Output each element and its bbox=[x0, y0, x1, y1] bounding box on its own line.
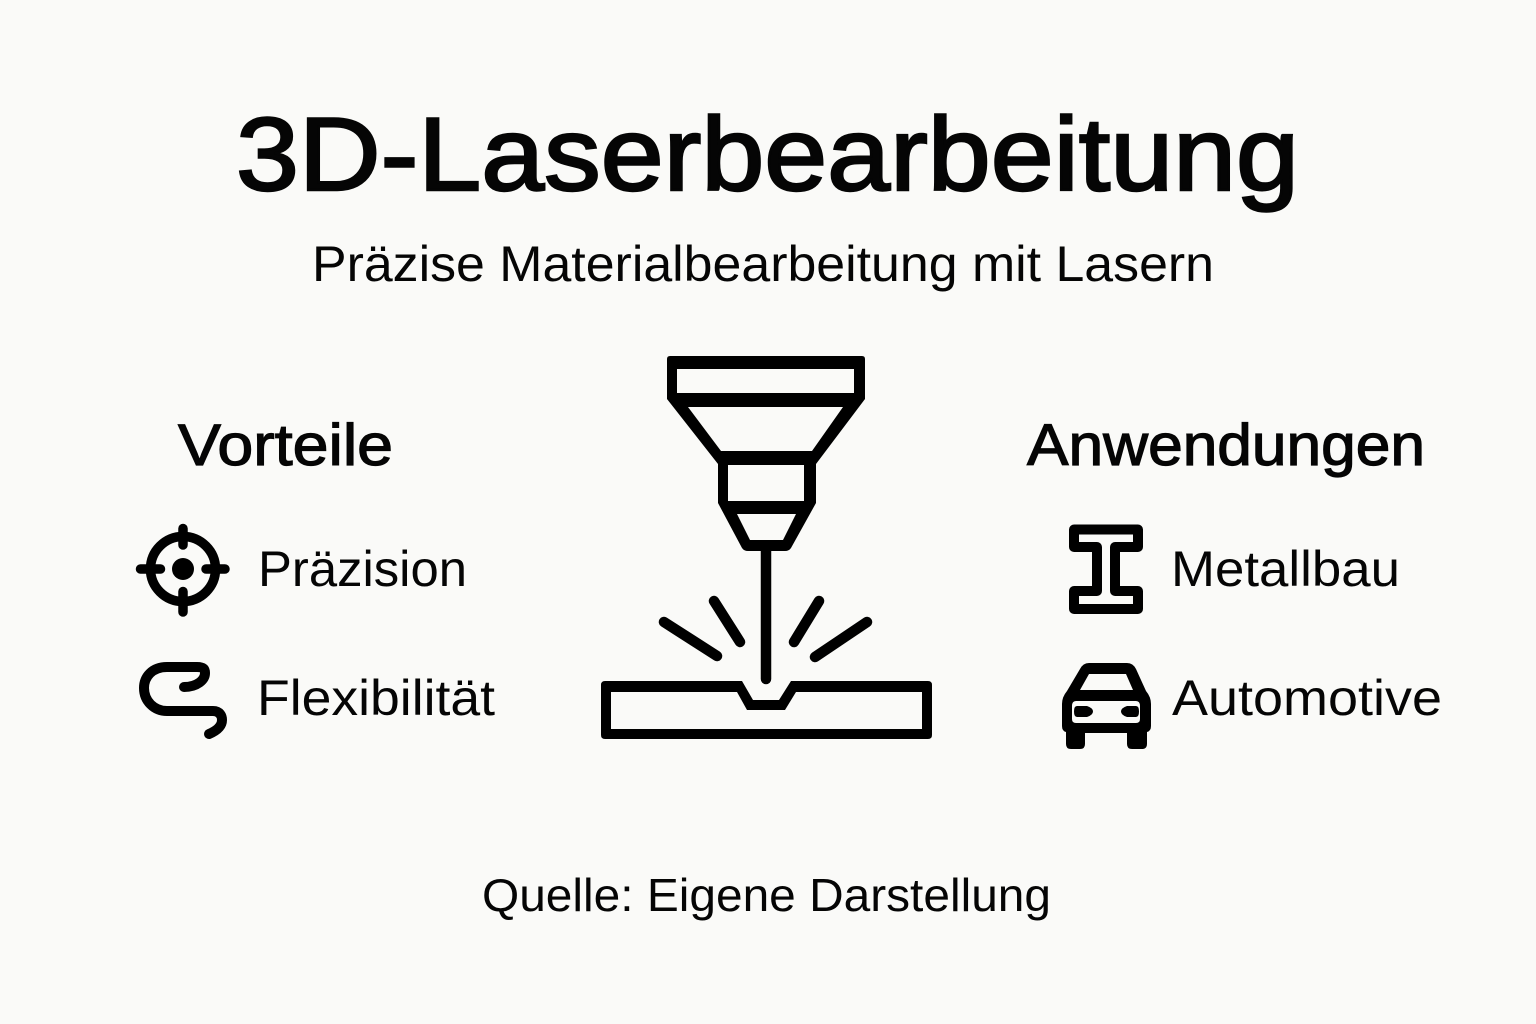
label: Präzision: Präzision bbox=[258, 541, 467, 597]
central icon: laser head cutting workpiece bbox=[601, 356, 932, 739]
laser beam bbox=[761, 550, 771, 679]
sparks bbox=[664, 601, 867, 657]
icon: flexible curve bbox=[144, 667, 222, 734]
icon: crosshair target bbox=[140, 528, 225, 612]
label: Flexibilität: Flexibilität bbox=[257, 670, 495, 726]
workpiece with notch bbox=[601, 681, 932, 739]
panel: Anwendungen bbox=[1027, 413, 1442, 749]
icon: steel I-beam bbox=[1074, 530, 1138, 609]
icon: car bbox=[1062, 663, 1151, 749]
label: Metallbau: Metallbau bbox=[1171, 541, 1400, 597]
heading: Vorteile: Vorteile bbox=[178, 413, 393, 478]
laser head bbox=[667, 356, 865, 551]
heading: Anwendungen: Anwendungen bbox=[1027, 413, 1425, 478]
panel: Vorteile bbox=[140, 413, 495, 734]
subtitle: Präzise Materialbearbeitung mit Lasern bbox=[312, 236, 1214, 292]
source note: Quelle: Eigene Darstellung bbox=[482, 869, 1051, 921]
title: 3D-Laserbearbeitung bbox=[236, 97, 1299, 213]
label: Automotive: Automotive bbox=[1172, 670, 1442, 726]
